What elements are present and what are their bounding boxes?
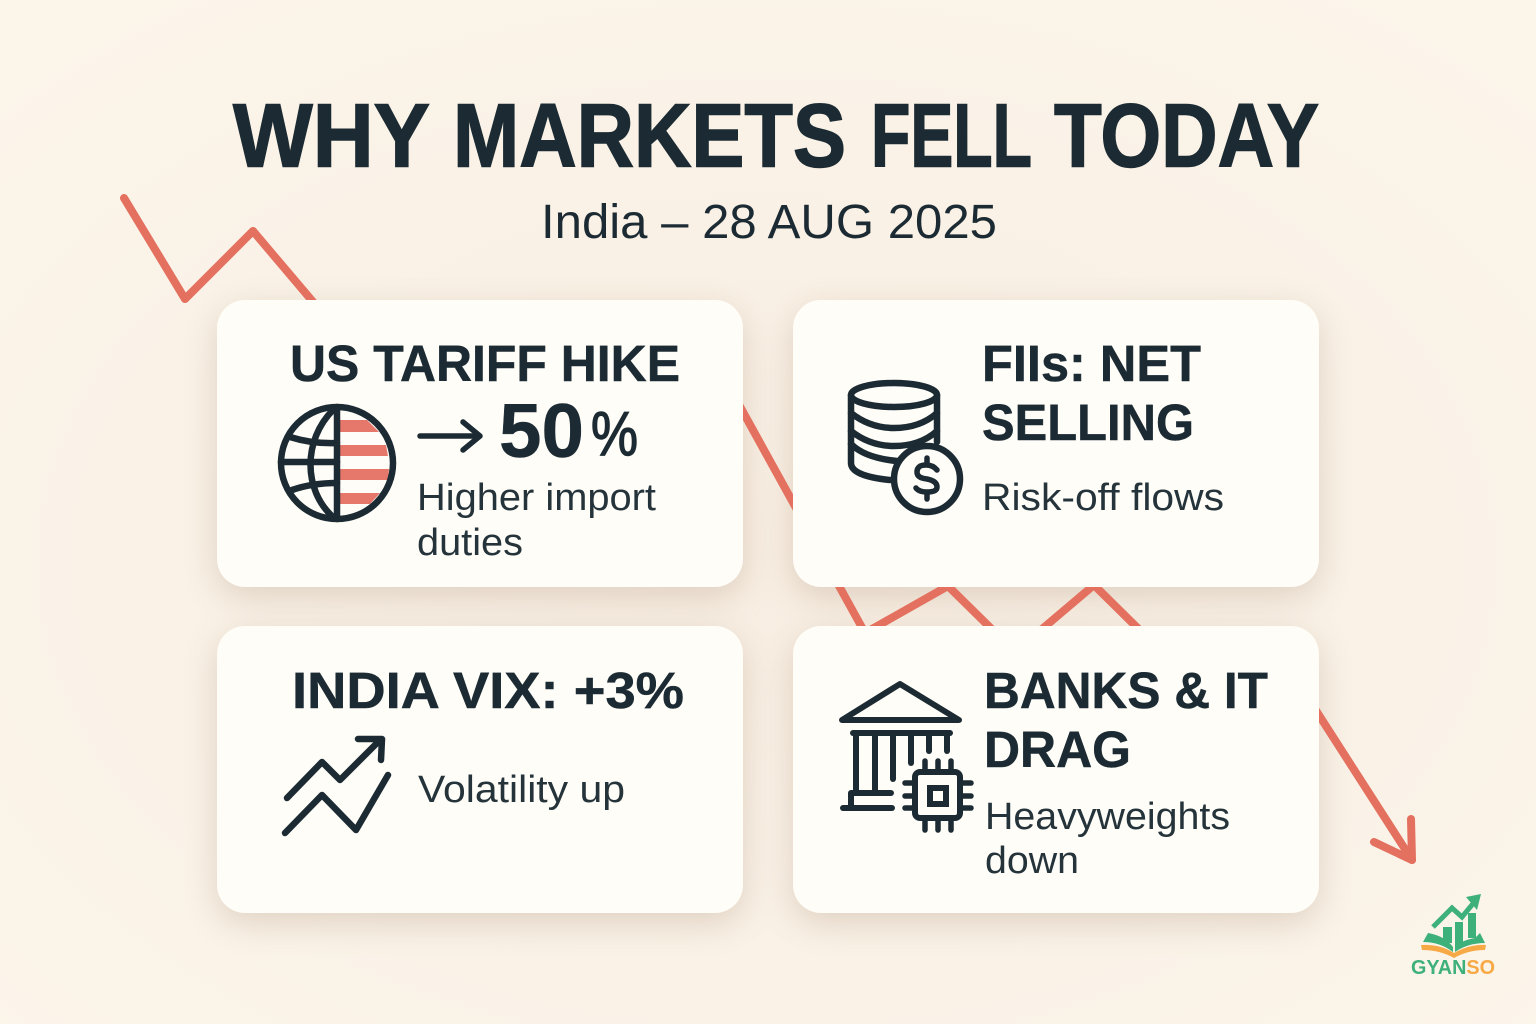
icon: volatility zigzag arrows [285, 739, 388, 833]
icon: coin stack with dollar [851, 383, 960, 512]
text: higher import duties [417, 477, 656, 564]
title [233, 86, 1319, 186]
text: heavyweights down: Heavyweights [985, 796, 1230, 838]
logo wordmark: GYANSO [1411, 957, 1495, 979]
text: volatility up: Volatility up [418, 769, 625, 811]
title: TODAY [1054, 86, 1319, 186]
figure: 50%: 50 [499, 389, 584, 474]
title: MARKETS [453, 86, 846, 186]
panel: US tariff hike [217, 300, 743, 587]
text: higher import duties: Higher import [417, 477, 656, 519]
falling market line with arrow [124, 198, 1412, 860]
text: higher import duties: duties [417, 522, 523, 564]
panel: banks and IT drag [793, 626, 1319, 913]
panel: FIIs net selling [793, 300, 1319, 587]
heading: India VIX +3%: INDIA VIX: +3% [292, 662, 684, 719]
heading: banks and IT drag [984, 662, 1268, 778]
heading: FIIs net selling: FIIs: NET [982, 335, 1201, 392]
heading: US tariff hike: US TARIFF HIKE [290, 335, 680, 392]
subtitle: India – 28 AUG 2025 [541, 196, 997, 249]
heading: banks and IT drag: BANKS & IT [984, 662, 1268, 719]
logo: Gyanso [1411, 894, 1495, 979]
text: risk-off flows: Risk-off flows [982, 477, 1224, 519]
panel: India VIX [217, 626, 743, 913]
text: heavyweights down: down [985, 840, 1079, 882]
text: heavyweights down [985, 796, 1230, 882]
figure: 50% [499, 389, 638, 474]
icon: book with rising chart [1421, 894, 1486, 958]
figure: 50%: % [591, 400, 638, 469]
icon: bank with chip [842, 684, 971, 830]
title: FELL [871, 86, 1032, 186]
heading: banks and IT drag: DRAG [984, 721, 1131, 778]
heading: FIIs net selling [982, 335, 1201, 451]
title: WHY [233, 86, 430, 186]
arrow: to 50 percent [420, 422, 480, 450]
icon: globe with US stripes [281, 407, 393, 519]
heading: FIIs net selling: SELLING [982, 394, 1194, 451]
